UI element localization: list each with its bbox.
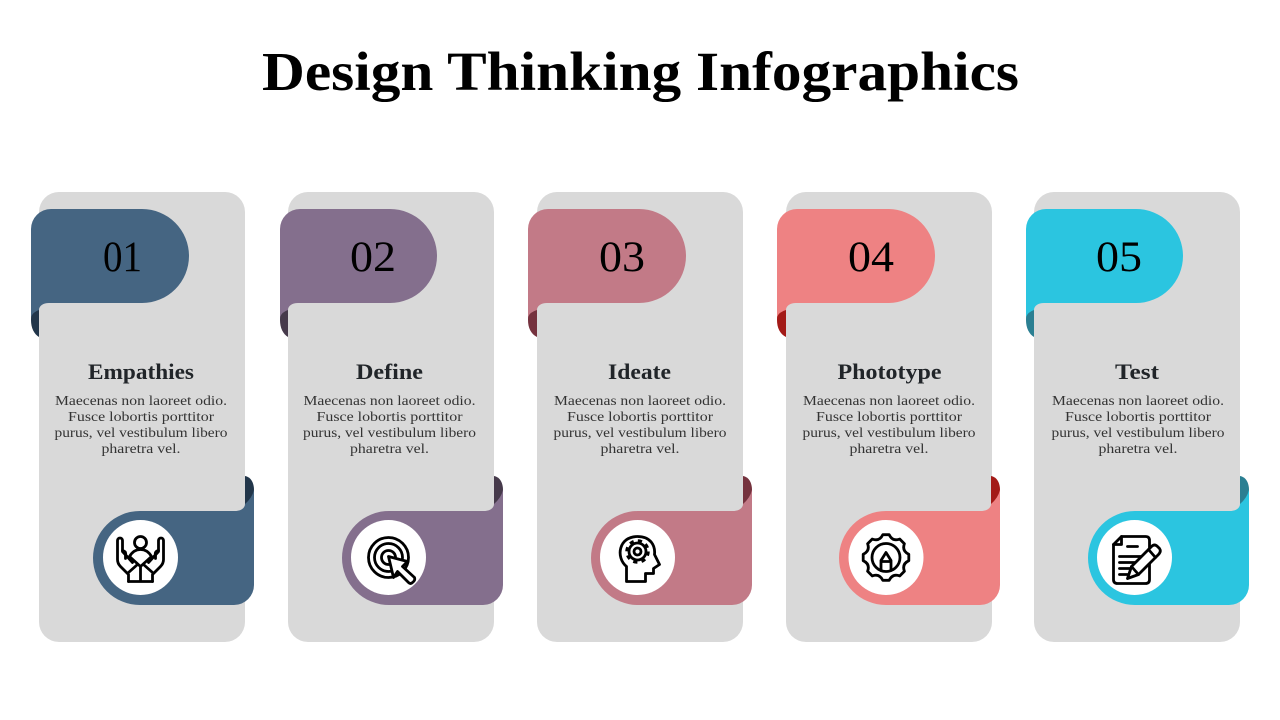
number: 04 — [848, 234, 894, 281]
bottom icon ribbon — [839, 490, 1000, 605]
bottom icon ribbon — [342, 490, 503, 605]
bottom fold shadow — [245, 476, 254, 508]
card background — [1034, 192, 1240, 642]
top fold shadow — [528, 303, 537, 337]
bottom icon ribbon — [1088, 490, 1249, 605]
body text: purus, vel vestibulum libero — [54, 426, 228, 441]
icon: document with pencil — [1097, 520, 1172, 595]
body text: Maecenas non laoreet odio. — [1052, 394, 1224, 409]
icon: hands holding person — [103, 520, 178, 595]
panel: step 04 Phototype — [777, 192, 1000, 642]
body text — [303, 394, 476, 457]
title: Design Thinking Infographics — [262, 41, 1019, 102]
bottom fold shadow — [743, 476, 752, 508]
card background — [288, 192, 494, 642]
bottom fold shadow — [991, 476, 1000, 508]
body text — [802, 394, 976, 457]
body text: Fusce lobortis porttitor — [816, 410, 962, 425]
bottom icon ribbon — [591, 490, 752, 605]
number: 05 — [1096, 234, 1142, 281]
body text: Maecenas non laoreet odio. — [55, 394, 227, 409]
top number ribbon — [777, 209, 935, 317]
body text: purus, vel vestibulum libero — [554, 426, 726, 441]
body text: Fusce lobortis porttitor — [1065, 410, 1211, 425]
top number ribbon — [528, 209, 686, 317]
number: 02 — [350, 234, 396, 281]
top number ribbon — [280, 209, 437, 317]
card background — [786, 192, 992, 642]
body text: Maecenas non laoreet odio. — [554, 394, 726, 409]
panel: step 02 Define — [280, 192, 503, 642]
body text: purus, vel vestibulum libero — [303, 426, 476, 441]
heading: Ideate — [608, 359, 671, 384]
body text — [1052, 394, 1224, 457]
panel: step 05 Test — [1026, 192, 1249, 642]
body text: purus, vel vestibulum libero — [802, 426, 976, 441]
bottom fold shadow — [494, 476, 503, 508]
bottom icon ribbon — [93, 490, 254, 605]
number: 01 — [103, 234, 142, 281]
top fold shadow — [777, 303, 786, 337]
icon: gear with pen nib — [848, 520, 924, 595]
body text: Maecenas non laoreet odio. — [304, 394, 476, 409]
top fold shadow — [1026, 303, 1034, 337]
body text: pharetra vel. — [350, 442, 429, 457]
card background — [537, 192, 743, 642]
heading: Phototype — [838, 359, 942, 384]
heading: Test — [1115, 359, 1160, 384]
top number ribbon — [31, 209, 189, 317]
body text: pharetra vel. — [600, 442, 680, 457]
heading: Define — [356, 359, 423, 384]
body text — [54, 394, 228, 457]
body text: Maecenas non laoreet odio. — [803, 394, 975, 409]
heading: Empathies — [88, 359, 194, 384]
body text: Fusce lobortis porttitor — [68, 410, 214, 425]
body text — [554, 394, 726, 457]
body text: pharetra vel. — [102, 442, 180, 457]
top fold shadow — [31, 303, 39, 337]
top fold shadow — [280, 303, 288, 337]
body text: Fusce lobortis porttitor — [316, 410, 463, 425]
panel: step 03 Ideate — [528, 192, 752, 642]
body text: Fusce lobortis porttitor — [567, 410, 713, 425]
panel: step 01 Empathies — [31, 192, 254, 642]
body text: pharetra vel. — [1098, 442, 1178, 457]
icon: head with gear — [600, 520, 675, 595]
body text: pharetra vel. — [850, 442, 928, 457]
icon: target with cursor — [351, 520, 426, 595]
top number ribbon — [1026, 209, 1183, 317]
bottom fold shadow — [1240, 476, 1249, 508]
card background — [39, 192, 245, 642]
body text: purus, vel vestibulum libero — [1052, 426, 1224, 441]
number: 03 — [599, 234, 645, 281]
